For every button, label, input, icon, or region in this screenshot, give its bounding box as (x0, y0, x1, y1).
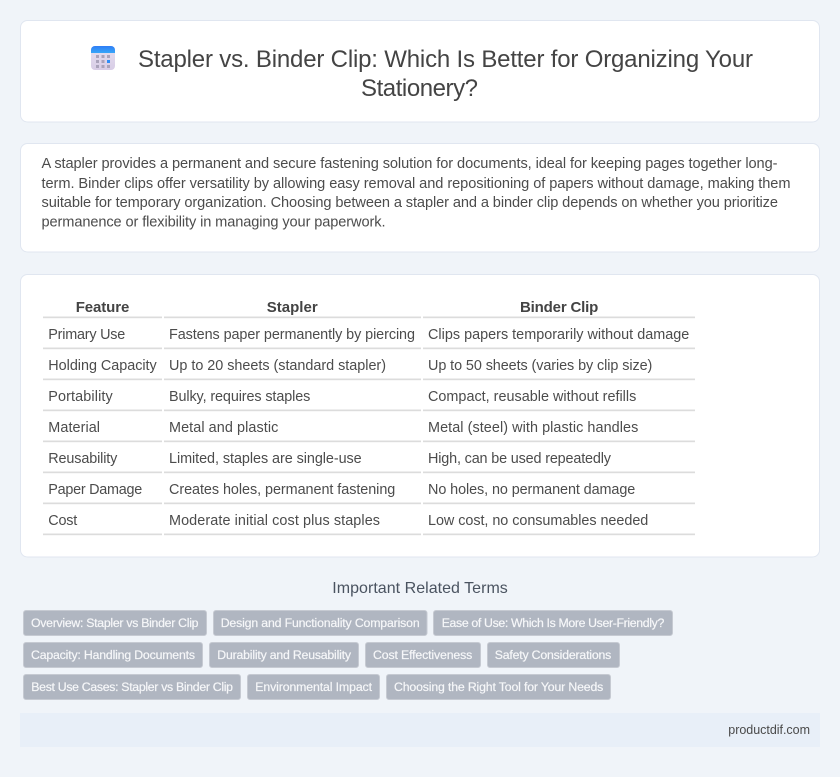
row: cost: Moderate initial cost plus staples (169, 513, 380, 529)
footer (20, 713, 820, 747)
table header row: Binder Clip (520, 299, 598, 316)
tag: design (214, 610, 427, 636)
row: reusability (43, 451, 695, 473)
tag: cost effectiveness (366, 642, 480, 668)
row: material: Metal (steel) with plastic handles (428, 420, 638, 436)
row: material: Material (48, 420, 100, 436)
tag: durability: Durability and Reusability (217, 648, 352, 662)
tag: ease of use (434, 610, 672, 636)
tag: ease of use: Ease of Use: Which Is More User-Friendly? (442, 616, 664, 630)
tag: safety (488, 642, 620, 668)
tag: cost effectiveness: Cost Effectiveness (373, 648, 472, 662)
row: cost: Cost (48, 513, 77, 529)
row: portability: Bulky, requires staples (169, 389, 310, 405)
row: cost (43, 513, 695, 535)
tag: choosing the right tool (386, 674, 610, 700)
row: paper damage: Creates holes, permanent fastening (169, 482, 395, 498)
row: primary use: Clips papers temporarily without damage (428, 327, 689, 343)
row: paper damage: Paper Damage (48, 482, 142, 498)
row: portability: Portability (48, 389, 113, 405)
row: holding capacity: Up to 50 sheets (varies by clip size) (428, 358, 652, 374)
tag: safety: Safety Considerations (495, 648, 611, 662)
tag: environmental impact (248, 674, 380, 700)
table header row: Feature (76, 299, 129, 316)
tag: capacity: Capacity: Handling Documents (31, 648, 195, 662)
intro paragraph: A stapler provides a permanent and secure fastening solution for documents, ideal for keeping pages together long- (42, 156, 778, 172)
icon: calendar (91, 46, 115, 70)
tag: capacity (24, 642, 202, 668)
row: holding capacity: Holding Capacity (48, 358, 157, 374)
row: material (43, 420, 695, 442)
tag: overview (24, 610, 206, 636)
related term tags (24, 610, 672, 700)
row: portability: Compact, reusable without refills (428, 389, 636, 405)
table header row (43, 299, 695, 318)
title: Stationery? (361, 75, 478, 102)
tag: overview: Overview: Stapler vs Binder Clip (31, 616, 199, 630)
intro paragraph: suitable for temporary organization. Choosing between a stapler and a binder clip depends on whether you prioritize (42, 195, 778, 211)
panel: header (20, 20, 820, 122)
row: material: Metal and plastic (169, 420, 278, 436)
row: reusability: Reusability (48, 451, 118, 467)
tag: best use cases (24, 674, 240, 700)
tag: choosing the right tool: Choosing the Right Tool for Your Needs (394, 680, 603, 694)
intro paragraph: permanence or flexibility in managing your paperwork. (42, 214, 386, 230)
tag: environmental impact: Environmental Impact (255, 680, 373, 694)
title (138, 46, 753, 102)
tag: design: Design and Functionality Comparison (221, 616, 420, 630)
row: holding capacity (43, 358, 695, 380)
footer: productdif.com (728, 723, 810, 737)
heading: important related terms: Important Related Terms (332, 580, 508, 597)
row: primary use (43, 327, 695, 349)
row: primary use: Primary Use (48, 327, 125, 343)
panel: introduction (20, 144, 820, 252)
row: holding capacity: Up to 20 sheets (standard stapler) (169, 358, 386, 374)
row: paper damage (43, 482, 695, 504)
row: portability (43, 389, 695, 411)
row: reusability: High, can be used repeatedly (428, 451, 612, 467)
title: Stapler vs. Binder Clip: Which Is Better for Organizing Your (138, 46, 753, 73)
intro paragraph (42, 156, 790, 230)
row: reusability: Limited, staples are single-use (169, 451, 362, 467)
row: paper damage: No holes, no permanent damage (428, 482, 635, 498)
intro paragraph: term. Binder clips offer versatility by allowing easy removal and repositioning of papers without damage, making them (42, 176, 790, 192)
tag: best use cases: Best Use Cases: Stapler vs Binder Clip (31, 680, 233, 694)
row: cost: Low cost, no consumables needed (428, 513, 648, 529)
tag: durability (210, 642, 358, 668)
row: primary use: Fastens paper permanently by piercing (169, 327, 415, 343)
table header row: Stapler (267, 299, 318, 316)
panel: comparison table (20, 274, 820, 557)
